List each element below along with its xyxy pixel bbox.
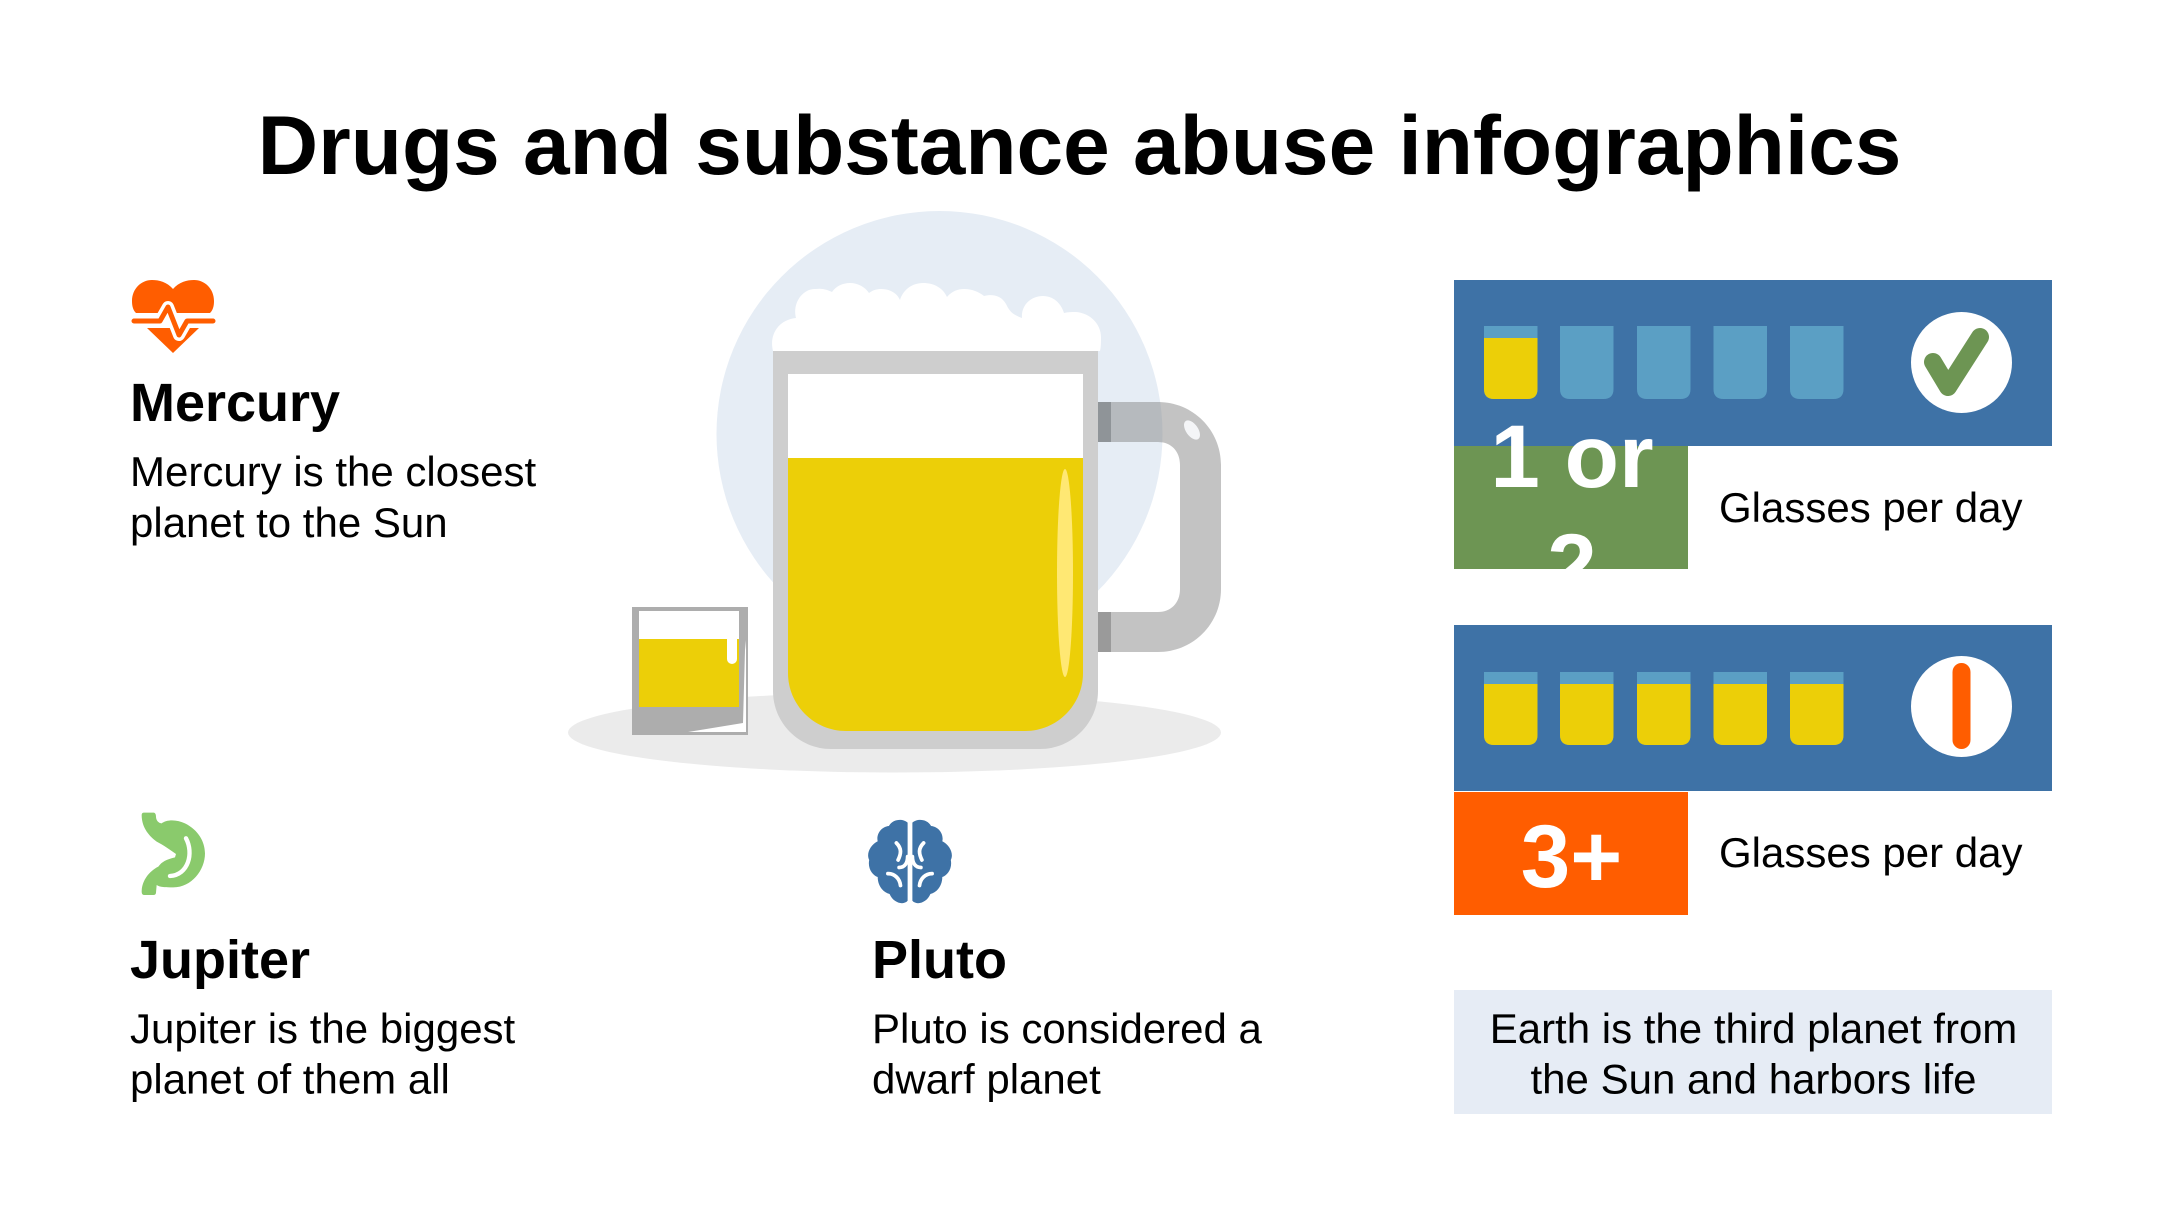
banner: glasses row 2 <box>1454 625 2052 791</box>
badge: 3+ <box>1454 792 1688 915</box>
glass 5 filled <box>1790 672 1844 745</box>
background circle <box>716 211 1162 657</box>
icon: warning bar <box>1911 656 2012 757</box>
glass 4 empty <box>1714 326 1767 399</box>
glass 3 filled <box>1637 672 1690 745</box>
mug body <box>773 351 1098 749</box>
icon: brain <box>868 820 952 903</box>
text: Pluto description: Pluto is considered a <box>872 1005 1263 1052</box>
beer <box>788 458 1083 731</box>
text: Pluto description: dwarf planet <box>872 1056 1101 1102</box>
banner: glasses row 1 <box>1454 280 2052 446</box>
glass 2 empty <box>1560 326 1614 399</box>
foam <box>772 283 1101 351</box>
panel: Pluto <box>868 820 1263 1102</box>
table shadow <box>568 692 1221 772</box>
mug inner <box>788 374 1083 464</box>
glass 1 filled <box>1484 672 1538 745</box>
beer highlight <box>1057 469 1073 677</box>
callout: Earth <box>1454 990 2052 1114</box>
text: Jupiter description: planet of them all <box>130 1056 450 1102</box>
callout: Earth: the Sun and harbors life <box>1531 1056 1976 1102</box>
heading: Pluto: Pluto <box>872 930 1007 990</box>
callout: Earth: Earth is the third planet from <box>1490 1005 2017 1052</box>
glass 1 filled <box>1484 326 1538 399</box>
icon: heart with pulse <box>132 280 214 353</box>
glass 3 empty <box>1637 326 1690 399</box>
glass 4 filled <box>1714 672 1767 745</box>
badge: 1 or 2: 2 <box>1547 515 1597 615</box>
heading: Jupiter: Jupiter <box>130 930 310 990</box>
panel: safe consumption <box>1454 280 2052 569</box>
glass 2 filled <box>1560 672 1614 745</box>
panel: risky consumption <box>1454 625 2052 915</box>
icon: check mark <box>1911 312 2012 413</box>
title: Drugs and substance abuse infographics <box>258 98 1901 192</box>
mug handle <box>1098 402 1221 652</box>
heading: Mercury: Mercury <box>130 373 340 433</box>
icon: stomach <box>142 813 205 895</box>
panel: Mercury <box>130 280 536 546</box>
label: glasses per day: Glasses per day <box>1719 829 2022 876</box>
text: Mercury description: planet to the Sun <box>130 499 448 546</box>
glass 5 empty <box>1790 326 1844 399</box>
badge: 1 or 2: 1 or <box>1490 406 1654 506</box>
label: glasses per day: Glasses per day <box>1719 484 2022 531</box>
panel: Jupiter <box>130 813 516 1102</box>
text: Mercury description: Mercury is the closest <box>130 448 536 495</box>
badge: 1 or 2 <box>1454 426 1688 569</box>
badge: 3+: 3+ <box>1521 806 1622 906</box>
illustration: beer mug and glass <box>568 211 1221 772</box>
text: Jupiter description: Jupiter is the biggest <box>130 1005 516 1052</box>
small glass <box>632 607 748 735</box>
